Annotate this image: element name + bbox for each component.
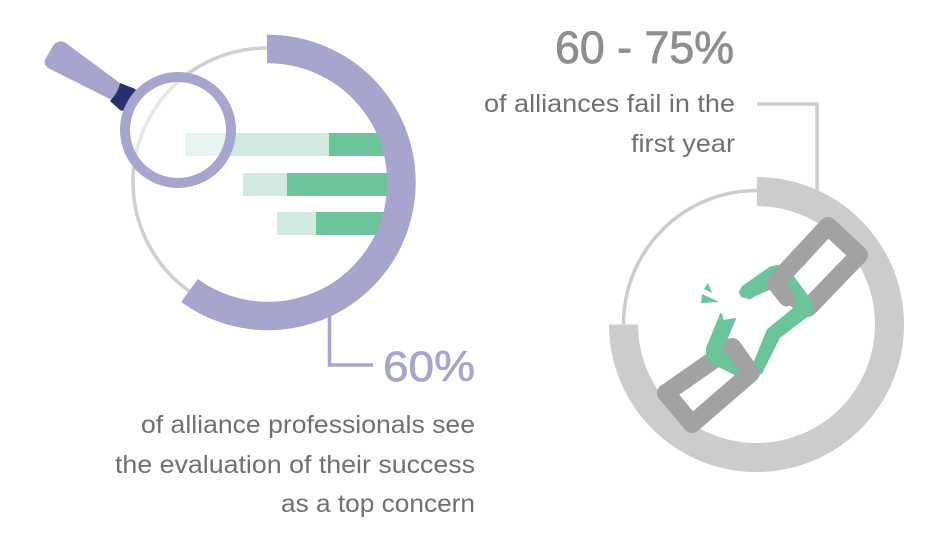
text block: 60-75% description: of alliances fail in the [484, 90, 735, 118]
green broken link, lower part [707, 314, 745, 378]
icon: magnifying glass [45, 42, 231, 183]
thin ring [133, 48, 401, 316]
text block: 60% description [115, 411, 475, 518]
thin ring quadrant [624, 190, 757, 324]
icon: broken chain [666, 226, 859, 424]
lower link [666, 347, 751, 424]
stat: 60%: 60% [383, 343, 475, 391]
bar chart [185, 133, 391, 235]
text block: 60-75% description: first year [631, 130, 735, 158]
text block: 60-75% description [484, 90, 735, 158]
panel: evaluation of success [45, 42, 475, 518]
progress band 75% [624, 192, 889, 457]
connector line [757, 104, 817, 195]
upper link [775, 226, 859, 308]
text block: 60% description: of alliance professionals see [141, 411, 475, 439]
gray overlap segments [733, 257, 800, 385]
text block: 60% description: as a top concern [281, 490, 475, 518]
text block: 60% description: the evaluation of their success [115, 451, 475, 479]
panel: alliances fail [484, 22, 889, 457]
progress band 60% [190, 49, 401, 316]
stat: 60 - 75%: 60 - 75% [555, 22, 734, 73]
connector line [330, 310, 373, 365]
shards [701, 283, 719, 303]
green broken link, upper part [740, 266, 812, 373]
